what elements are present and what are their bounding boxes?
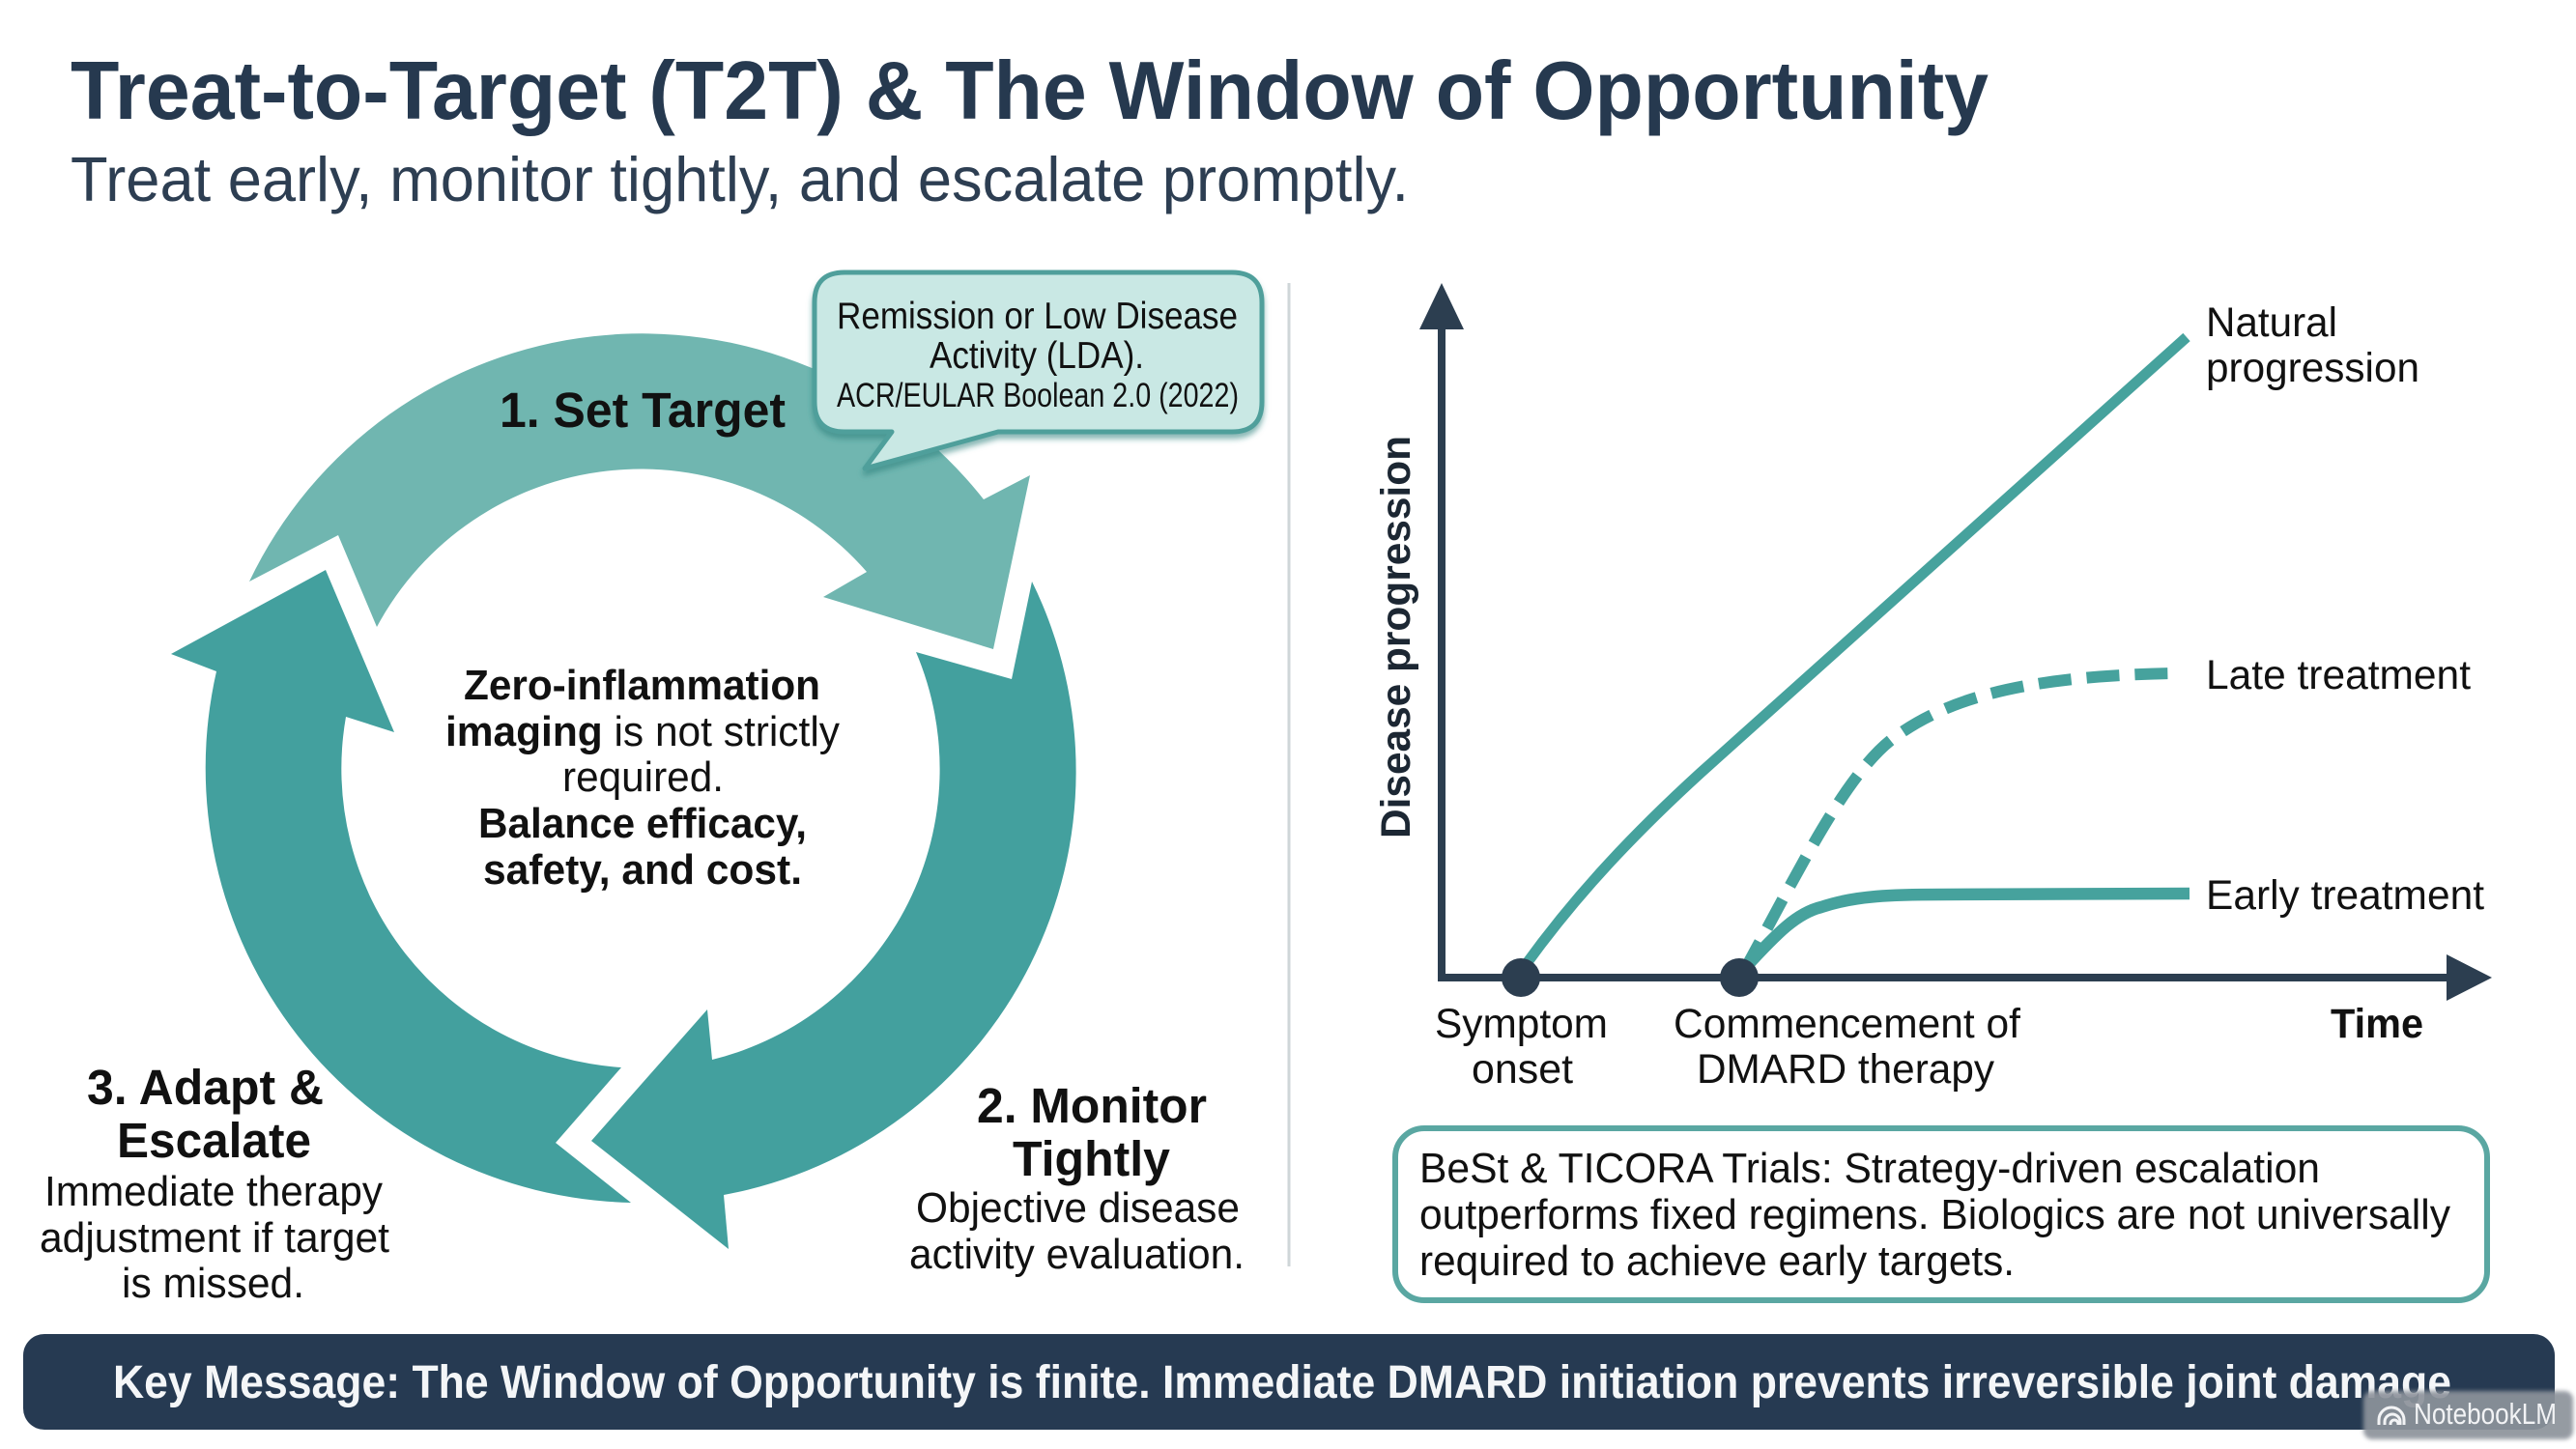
icon: NotebookLM logo — [2379, 1407, 2404, 1425]
heading: set target: 1. Set Target — [500, 383, 786, 438]
panel: trials note: BeSt & TICORA Trials: Strategy-driven escalation — [1419, 1145, 2320, 1192]
label: symptom onset — [1435, 1001, 1608, 1093]
callout: remission target: Activity (LDA). — [930, 335, 1144, 377]
center text — [445, 662, 840, 894]
label: natural progression: progression — [2206, 345, 2419, 391]
panel: treat-to-target cycle — [40, 272, 1262, 1307]
arrow: monitor to adapt — [591, 582, 1076, 1249]
center text: required. — [562, 753, 724, 801]
panel: trials note: outperforms fixed regimens. Biologics are not universally — [1419, 1191, 2450, 1238]
label: commencement of DMARD therapy: DMARD therapy — [1697, 1046, 1994, 1093]
y-axis label: Disease progression — [1373, 436, 1419, 838]
step 2: monitor tightly — [909, 1078, 1245, 1278]
step 3: adapt and escalate: is missed. — [122, 1260, 304, 1307]
x-axis label: Time — [2331, 1001, 2423, 1047]
step 2: monitor tightly: activity evaluation. — [909, 1231, 1245, 1278]
arrow: set target to monitor — [249, 333, 1030, 649]
panel: trials note — [1395, 1128, 2487, 1300]
step 2: monitor tightly: Objective disease — [916, 1184, 1240, 1232]
step 2: monitor tightly: Tightly — [1013, 1131, 1171, 1186]
callout: remission target: ACR/EULAR Boolean 2.0 (2022) — [837, 377, 1239, 414]
step 3: adapt and escalate: adjustment if target — [40, 1214, 389, 1262]
callout: remission target: Remission or Low Disease — [837, 296, 1238, 337]
banner: key message — [23, 1334, 2555, 1430]
marker: DMARD start — [1720, 958, 1759, 997]
axes — [1419, 283, 2492, 1001]
center text: Zero-inflammation — [464, 662, 820, 709]
label: symptom onset: onset — [1472, 1046, 1573, 1093]
center text: Balance efficacy, — [478, 800, 807, 847]
label: symptom onset: Symptom — [1435, 1001, 1608, 1047]
step 3: adapt and escalate: Immediate therapy — [44, 1168, 383, 1215]
subtitle: Treat early, monitor tightly, and escalate promptly. — [71, 144, 1409, 214]
watermark: NotebookLM — [2363, 1391, 2573, 1439]
arrow: adapt to set target — [171, 570, 631, 1203]
panel: trials note: required to achieve early targets. — [1419, 1237, 2015, 1285]
step 3: adapt and escalate — [40, 1060, 389, 1307]
label: natural progression — [2206, 299, 2419, 391]
label: commencement of DMARD therapy — [1674, 1001, 2021, 1093]
label: late treatment: Late treatment — [2206, 652, 2471, 698]
line: early treatment — [1745, 894, 2190, 968]
banner: key message: Key Message: The Window of Opportunity is finite. Immediate DMARD initiation prevents irreversible joint damage — [113, 1357, 2451, 1408]
line: natural progression — [1525, 337, 2187, 966]
step 3: adapt and escalate: Escalate — [117, 1113, 311, 1168]
chart: disease progression over time — [1373, 283, 2492, 1093]
title: Treat-to-Target (T2T) & The Window of Opportunity — [71, 45, 1989, 137]
center text: safety, and cost. — [483, 846, 802, 894]
label: natural progression: Natural — [2206, 299, 2337, 346]
label: early treatment: Early treatment — [2206, 872, 2484, 919]
step 3: adapt and escalate: 3. Adapt & — [87, 1060, 324, 1115]
callout: remission target — [815, 272, 1262, 469]
label: commencement of DMARD therapy: Commencement of — [1674, 1001, 2021, 1047]
center text: imaging is not strictly — [445, 708, 840, 755]
marker: symptom onset — [1502, 958, 1540, 997]
step 2: monitor tightly: 2. Monitor — [977, 1078, 1207, 1133]
line: late treatment — [1744, 673, 2174, 971]
